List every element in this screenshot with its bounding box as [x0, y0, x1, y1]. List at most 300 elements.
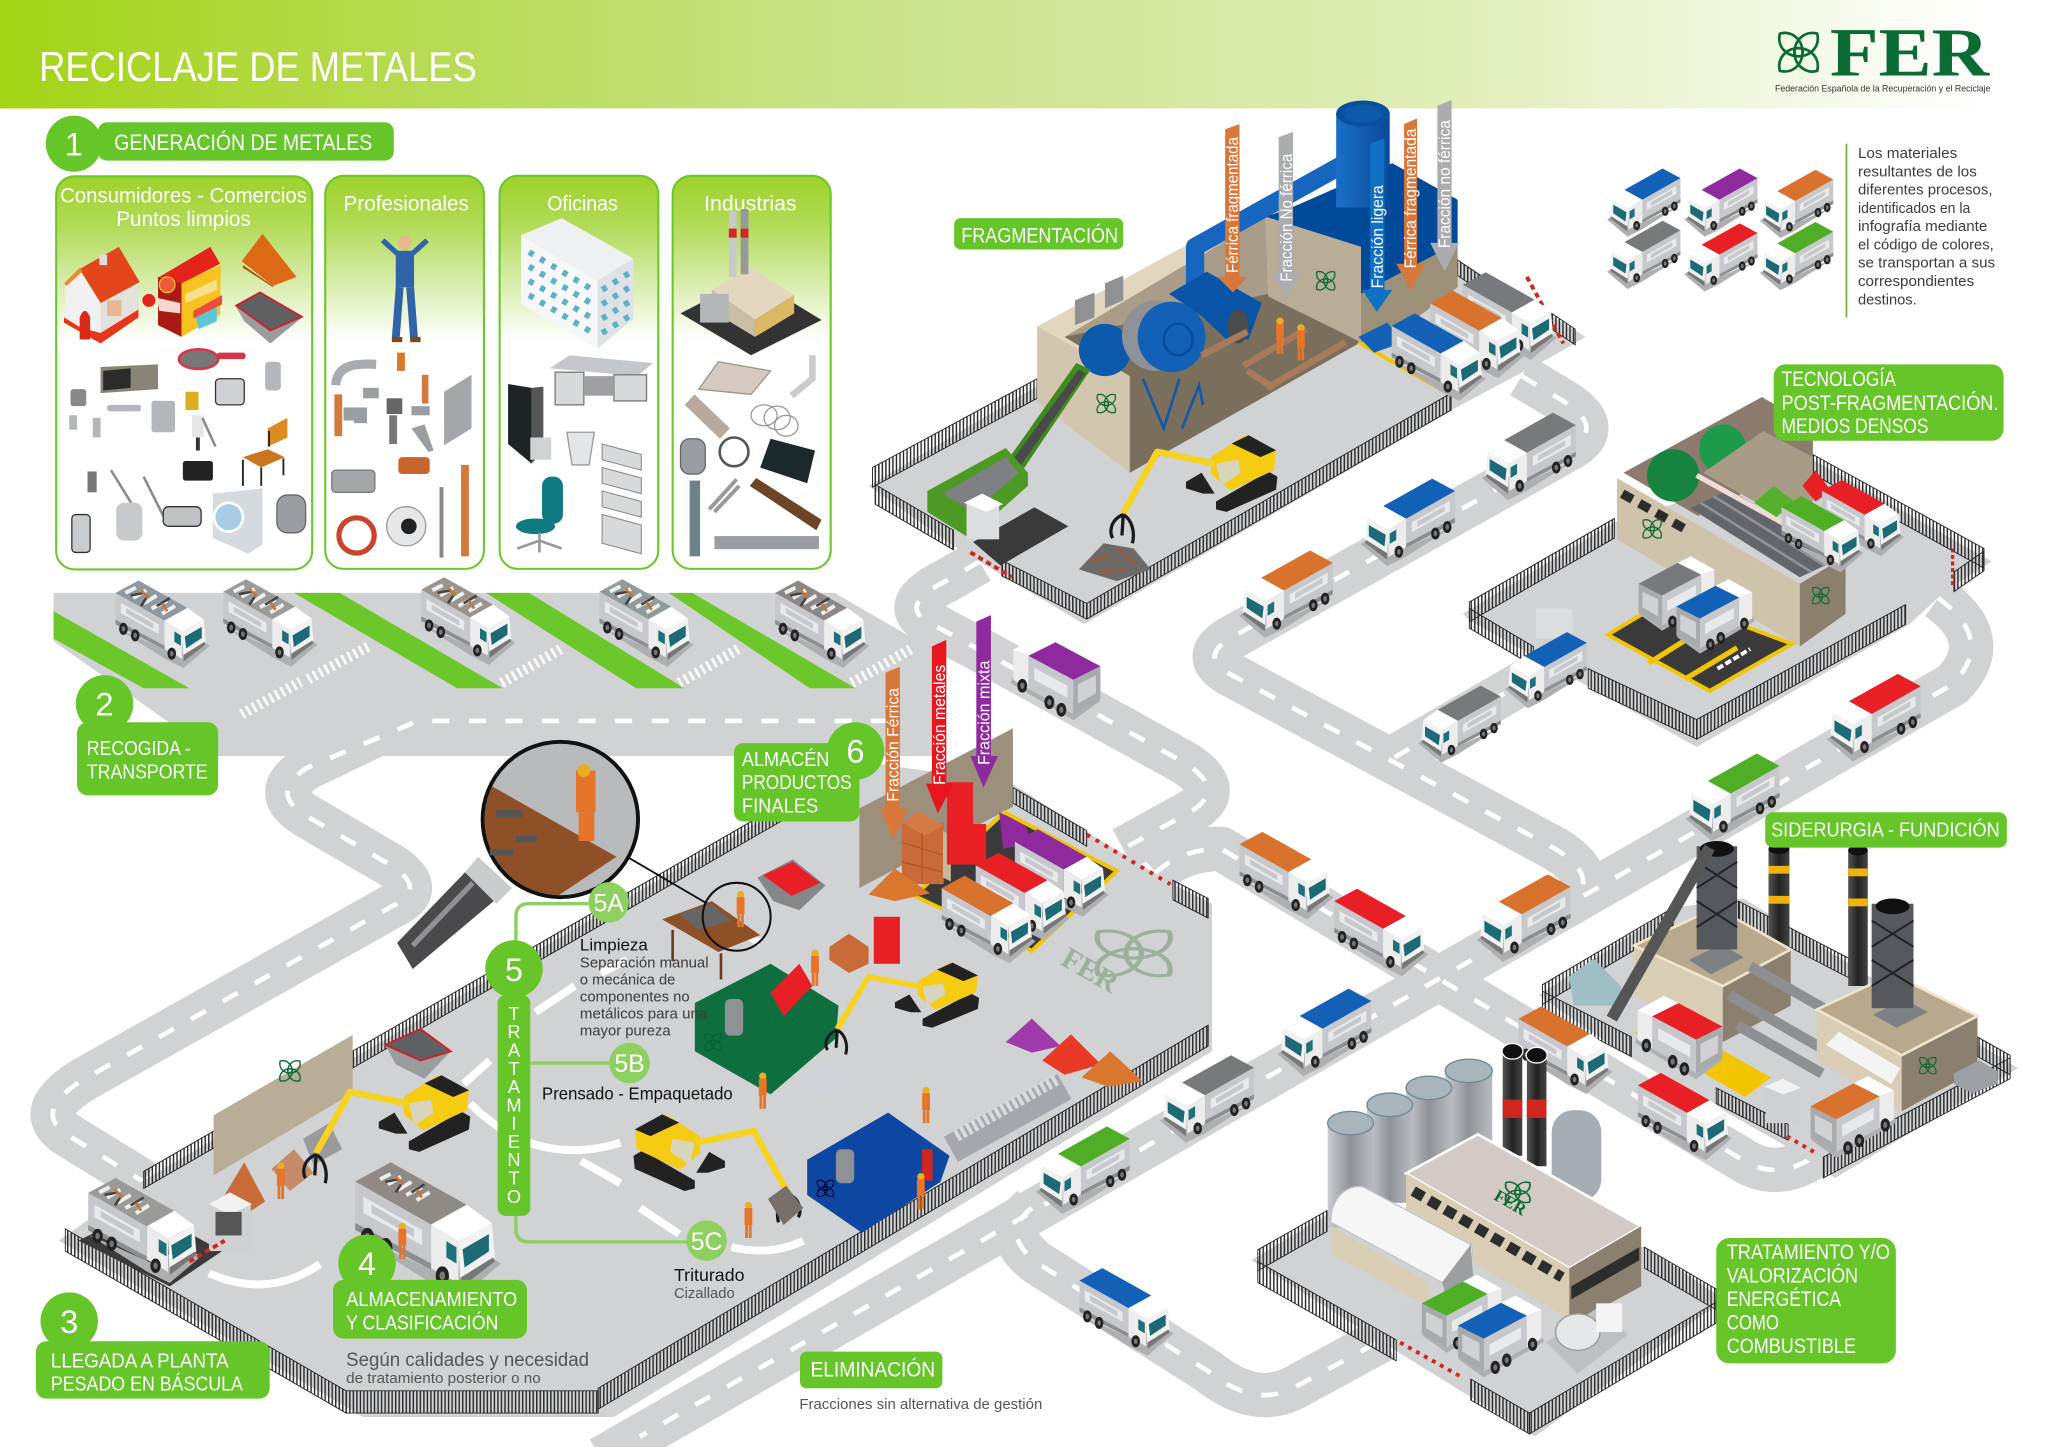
icon: gasket — [690, 400, 725, 434]
truck gray — [1482, 413, 1576, 500]
step 4: almacenamiento y clasificación: ALMACENAMIENTO — [346, 1289, 517, 1311]
text: triturado: Triturado — [674, 1265, 745, 1285]
icon: wire coil — [720, 437, 748, 466]
truck blue — [1361, 479, 1455, 566]
step 4: almacenamiento y clasificación: Y CLASIFICACIÓN — [346, 1311, 498, 1334]
arrow: fracción mixta — [970, 615, 998, 787]
collection trucks — [116, 577, 869, 668]
booth — [1765, 1079, 1801, 1123]
entrance truck — [88, 1178, 201, 1283]
worker — [759, 1072, 767, 1109]
icon: brake disc — [387, 507, 426, 546]
red arrow pile — [1802, 470, 1831, 501]
truck red — [1638, 1073, 1732, 1160]
ac unit — [1954, 1060, 1997, 1093]
purple bay — [999, 812, 1032, 849]
truck gray — [1160, 1055, 1254, 1143]
post-fragmentation plant — [1505, 397, 1953, 708]
truck green — [1782, 496, 1863, 572]
panel: consumidores: Puntos limpios — [116, 207, 251, 231]
hopper scrap — [943, 457, 1019, 512]
press logo — [705, 1034, 721, 1050]
text: limpieza: Limpieza — [580, 937, 649, 955]
arrow: fracción no férrica 1: Fracción No férrica — [1277, 153, 1296, 282]
arrow: fracción no férrica 1 — [1272, 132, 1301, 298]
icon: waste basket — [567, 432, 594, 465]
booth — [1536, 609, 1573, 639]
chimney pair — [1502, 1043, 1547, 1166]
truck red — [1635, 996, 1722, 1079]
green feed conveyor — [1000, 363, 1091, 470]
icon: pan — [179, 349, 246, 369]
excavator shredder — [633, 1114, 800, 1222]
label: tratamiento y/o valorización: ENERGÉTICA — [1727, 1288, 1841, 1311]
label: tratamiento y/o valorización: COMO — [1727, 1311, 1779, 1334]
panel: profesionales: Profesionales — [344, 191, 469, 215]
barrier — [970, 552, 1012, 577]
step 2: recogida - transporte: TRANSPORTE — [87, 761, 208, 783]
label: siderurgia - fundición — [1765, 812, 2007, 848]
worker — [811, 950, 819, 986]
step 5: tratamiento: A — [508, 1076, 521, 1097]
icon: house — [64, 247, 140, 343]
wall logo — [280, 1061, 300, 1081]
parking bays — [914, 812, 1117, 951]
badge 5B — [609, 1043, 650, 1083]
legend text: correspondientes — [1858, 273, 1974, 290]
pile purple — [1006, 1019, 1061, 1053]
panel: oficinas — [500, 176, 658, 569]
worker — [398, 1223, 406, 1259]
label: fragmentación — [954, 218, 1123, 249]
label: fragmentación: FRAGMENTACIÓN — [961, 224, 1118, 247]
label: tecnología post-fragmentación: POST-FRAGMENTACIÓN. — [1782, 392, 1998, 415]
text: limpieza: Separación manual — [580, 955, 709, 972]
badge 5C — [686, 1220, 727, 1261]
step 6: almacén productos finales: PRODUCTOS — [742, 772, 852, 794]
treatment plant — [1328, 1043, 1641, 1378]
arrow: fracción ligera — [1362, 138, 1392, 312]
icon: steel tube — [714, 536, 819, 549]
lattice tower 1 — [1697, 841, 1737, 949]
logo: FER: FER — [1830, 14, 1990, 91]
badge 5A: 5A — [593, 891, 624, 918]
arrow: fracción no férrica 2 — [1430, 100, 1459, 272]
arrow: fracción metales: Fracción metales — [930, 665, 949, 785]
pile red — [1042, 1034, 1101, 1075]
scale pad — [78, 1208, 222, 1286]
step 6: almacén productos finales: FINALES — [742, 795, 818, 817]
corrugated roof — [1690, 490, 1844, 577]
icon: washing machine — [213, 488, 263, 554]
sorted scrap — [225, 1123, 342, 1217]
text: según calidades — [346, 1350, 589, 1387]
truck orange back — [1811, 1076, 1897, 1158]
icon: office chair — [516, 477, 563, 552]
step 6: almacén productos finales — [734, 722, 884, 821]
step 5: tratamiento: N — [507, 1149, 521, 1170]
siderurgia plant — [1518, 841, 1997, 1160]
parking lines — [1648, 632, 1737, 679]
roof vents — [1075, 276, 1123, 325]
silo 4 — [1445, 1059, 1492, 1162]
orange cubes — [829, 934, 869, 973]
chimney 2 — [1848, 845, 1868, 986]
shredder scrap — [768, 1186, 803, 1225]
inner room — [1703, 431, 1813, 503]
label: eliminación — [800, 1352, 942, 1388]
floor logo: FER — [1056, 941, 1125, 1000]
truck 5 — [775, 580, 869, 668]
step 2: recogida - transporte — [76, 675, 218, 795]
truck gray back — [1639, 556, 1717, 631]
icon: desk — [550, 355, 653, 405]
label: eliminación: ELIMINACIÓN — [810, 1358, 935, 1381]
truck red — [1827, 674, 1921, 761]
badge 5B: 5B — [614, 1051, 645, 1078]
badge 5A — [588, 882, 629, 923]
right window — [1571, 1247, 1639, 1299]
header band — [0, 0, 2048, 108]
legend text: diferentes procesos, — [1858, 182, 1992, 199]
collection road band — [54, 593, 934, 756]
green verges — [54, 593, 856, 688]
excavator storage — [304, 1075, 470, 1183]
yellow bay — [1633, 1032, 1771, 1097]
icon: recycling container — [242, 234, 296, 287]
step 5: tratamiento: E — [508, 1131, 520, 1152]
icon: factory — [680, 209, 822, 355]
green hopper — [927, 448, 1028, 538]
gate barrier — [1400, 1343, 1463, 1378]
step 5: tratamiento: M — [506, 1094, 522, 1115]
floor arrow — [1718, 649, 1750, 669]
panel: industrias — [673, 176, 831, 569]
legend: colour coded trucks — [1607, 168, 1833, 292]
panel: oficinas: Oficinas — [547, 191, 618, 215]
roof — [1406, 1134, 1641, 1268]
blue shredder — [807, 1113, 950, 1233]
text: limpieza: mayor pureza — [580, 1023, 671, 1040]
truck purple — [1015, 829, 1109, 917]
roof stripes — [1701, 496, 1825, 572]
step 5: tratamiento: 5 — [505, 951, 523, 988]
logo on wall — [1643, 520, 1661, 538]
icon: microwave — [101, 364, 158, 393]
truck green — [1036, 1126, 1130, 1214]
step 2: recogida - transporte: RECOGIDA - — [87, 738, 191, 760]
icon: office block — [521, 218, 633, 349]
step 3: llegada a planta: LLEGADA A PLANTA — [51, 1350, 229, 1372]
truck red — [976, 853, 1070, 940]
pile orange — [1081, 1051, 1143, 1087]
shredder logo — [817, 1180, 834, 1197]
drum 1 — [1122, 300, 1206, 372]
icon: filing cabinet — [508, 384, 551, 464]
sorting wall — [214, 1035, 353, 1175]
worker — [277, 1163, 285, 1199]
logo on wall — [1317, 272, 1335, 290]
legend truck green — [1760, 222, 1833, 290]
legend text: se transportan a sus — [1858, 255, 1995, 272]
icon: copper pipe — [461, 465, 469, 556]
pointer line — [627, 857, 712, 906]
fences — [65, 260, 2010, 1434]
parking — [1608, 598, 1792, 691]
truck red — [1822, 480, 1904, 556]
red cubes — [874, 917, 900, 964]
arrow: férrica fragmentada 1: Férrica fragmentada — [1223, 137, 1242, 273]
legend text: el código de colores, — [1858, 236, 1994, 253]
step 2: recogida - transporte: 2 — [95, 686, 114, 723]
left face — [1617, 478, 1800, 646]
internal conveyors — [1202, 329, 1345, 388]
icon: column — [690, 481, 700, 556]
truck orange — [1239, 550, 1333, 638]
rear tank — [1552, 1110, 1601, 1201]
building left face — [1037, 326, 1130, 473]
title: RECICLAJE DE METALES — [39, 43, 477, 90]
icon: metal rings — [751, 405, 798, 436]
icon: worker — [383, 236, 427, 342]
barrier — [189, 1241, 225, 1262]
label: tecnología post-fragmentación: MEDIOS DENSOS — [1782, 415, 1928, 438]
tipper truck — [355, 1162, 501, 1298]
truck blue — [1277, 989, 1371, 1076]
icon: window frame — [792, 355, 812, 396]
duct — [1195, 158, 1354, 313]
building 1 — [1634, 908, 1791, 1042]
step 3: llegada a planta: PESADO EN BÁSCULA — [51, 1372, 243, 1395]
label: siderurgia - fundición: SIDERURGIA - FUNDICIÓN — [1771, 819, 2000, 842]
magnifier — [470, 742, 638, 901]
silo 3 — [1406, 1076, 1452, 1185]
green press — [695, 964, 839, 1094]
worker — [737, 891, 744, 927]
truck green back — [1422, 1275, 1504, 1353]
icon: steel beam — [750, 478, 822, 530]
chimney — [1336, 101, 1390, 208]
worker — [744, 1202, 752, 1238]
icon: pot — [216, 379, 244, 405]
arrow: fracción férrica: Fracción Férrica — [884, 687, 903, 802]
pipes — [1729, 966, 1842, 1073]
icon: perforated sheet — [699, 362, 771, 394]
excavator press — [826, 963, 979, 1054]
green drum 1 — [1647, 449, 1699, 501]
truck blue — [1392, 313, 1486, 401]
road trucks upper — [1010, 413, 1921, 841]
text: limpieza: componentes no — [580, 989, 690, 1006]
logo side — [1813, 587, 1829, 604]
icon: valve wheel — [339, 518, 374, 553]
step 3: llegada a planta: 3 — [60, 1303, 78, 1340]
truck orange — [1240, 832, 1334, 919]
worker — [917, 1173, 925, 1209]
step 6: almacén productos finales: ALMACÉN — [742, 748, 829, 771]
weighbridge — [973, 507, 1068, 565]
blue pile — [1358, 323, 1404, 353]
gate booth — [964, 494, 1003, 539]
icon: copper fitting — [398, 457, 430, 474]
text: según calidades: de tratamiento posterior o no — [346, 1371, 541, 1387]
bays — [1361, 243, 1458, 342]
label: tecnología post-fragmentación: TECNOLOGÍA — [1782, 368, 1896, 391]
connector lines for step 5 — [516, 904, 687, 1242]
step 5: tratamiento: I — [511, 1113, 516, 1134]
building 2 — [1817, 974, 1977, 1111]
icon: skip — [235, 292, 303, 343]
text: fracciones sin alternativa: Fracciones sin alternativa de gestión — [799, 1396, 1042, 1413]
truck 3 — [421, 577, 515, 665]
window band — [1622, 494, 1685, 529]
text: triturado — [674, 1265, 745, 1302]
logo on side wall — [1097, 394, 1115, 413]
label: tratamiento y/o valorización: TRATAMIENTO Y/O — [1727, 1241, 1890, 1264]
truck purple — [1010, 635, 1100, 720]
logo: FER: Federación Española de la Recuperación y el Reciclaje — [1775, 83, 1991, 93]
chimney 1 — [1768, 844, 1789, 948]
legend text: infografía mediante — [1858, 218, 1987, 235]
label: tratamiento y/o valorización — [1716, 1238, 1896, 1363]
icon: steel rod — [440, 487, 443, 558]
text: triturado: Cizallado — [674, 1285, 735, 1302]
gate barrier — [1787, 1136, 1818, 1154]
icon: cylinder — [680, 439, 705, 474]
scrap pile — [1079, 543, 1151, 581]
floor logo — [1056, 931, 1170, 1000]
text: prensado: Prensado - Empaquetado — [542, 1084, 733, 1104]
truck 4 — [600, 579, 694, 667]
arrow: fracción mixta: Fracción mixta — [974, 660, 993, 765]
step 6: almacén productos finales: 6 — [846, 733, 865, 770]
windows band — [1413, 1191, 1562, 1277]
icon: metal cylinder — [277, 495, 306, 533]
step 5: tratamiento: A — [508, 1040, 521, 1061]
icon: camera — [183, 461, 213, 481]
excavator — [1111, 435, 1277, 543]
right face — [1800, 556, 1846, 646]
skip — [385, 1028, 451, 1079]
orange pile — [869, 868, 930, 901]
text: limpieza: o mecánica de — [580, 972, 675, 989]
inclined conveyor — [1612, 848, 1710, 1019]
step 4: almacenamiento y clasificación — [333, 1235, 527, 1339]
panel: industrias: Industrias — [704, 191, 797, 215]
text: limpieza: metálicos para una — [580, 1006, 708, 1023]
gate barrier — [1527, 277, 1563, 343]
legend text: Los materiales — [1858, 145, 1957, 162]
roof logo: FER — [1491, 1186, 1530, 1220]
step 5: tratamiento: T — [508, 1058, 520, 1079]
rear wall — [1266, 217, 1361, 342]
road trucks lower — [1036, 832, 1571, 1356]
truck gray — [1463, 272, 1557, 360]
green pile — [1754, 486, 1795, 517]
panel: profesionales — [325, 176, 484, 569]
text: según calidades: Según calidades y necesidad — [346, 1350, 589, 1371]
workers — [1276, 318, 1284, 354]
step 1: generación de metales: GENERACIÓN DE METALES — [114, 130, 372, 155]
icon: shop — [142, 247, 222, 337]
left wall — [1406, 1173, 1569, 1319]
icon: chair — [243, 418, 287, 486]
red cubes — [947, 782, 986, 865]
white tank — [1331, 1187, 1473, 1306]
icon: drum — [116, 503, 142, 541]
detail circle — [703, 883, 771, 951]
step 5: tratamiento: O — [507, 1186, 521, 1207]
legend truck orange — [1760, 170, 1833, 238]
gate barrier — [1087, 835, 1170, 884]
arrow: fracción no férrica 2: Fracción no férrica — [1435, 120, 1454, 248]
road network — [53, 376, 1971, 1447]
icon: blender — [72, 515, 90, 552]
step 3: llegada a planta — [36, 1292, 270, 1399]
interior wall — [1064, 217, 1268, 353]
floor — [1064, 294, 1361, 473]
step 5: tratamiento: T — [508, 1168, 520, 1189]
zebra crossings — [242, 646, 1147, 888]
bale pile — [794, 1060, 846, 1100]
icon: valve — [332, 470, 375, 492]
truck gray — [1418, 686, 1501, 763]
logo: FER — [1775, 14, 1991, 93]
icon: household metal items — [69, 362, 281, 518]
legend text — [1846, 144, 1995, 317]
icon: shelving — [602, 444, 641, 554]
lattice tower 2 — [1872, 898, 1913, 1008]
arrow: férrica fragmentada 2 — [1396, 118, 1425, 290]
arrow: férrica fragmentada 2: Férrica fragmentada — [1401, 128, 1420, 268]
worker — [922, 1087, 930, 1123]
step 5: tratamiento — [485, 940, 543, 1216]
icon: faucet — [336, 364, 376, 385]
booth — [1401, 1303, 1428, 1343]
arrow: fracción ligera: Fracción ligera — [1368, 185, 1387, 288]
label: tratamiento y/o valorización: COMBUSTIBLE — [1727, 1335, 1856, 1358]
icon: screws and parts — [334, 353, 434, 452]
hood — [1169, 272, 1262, 340]
truck orange — [1518, 1006, 1612, 1094]
truck 2 — [223, 579, 317, 667]
legend truck red — [1684, 223, 1758, 292]
fragmentation plant — [927, 101, 1563, 581]
badge 5C: 5C — [691, 1229, 722, 1256]
warehouse wall — [859, 728, 1013, 888]
main recycling plant details — [78, 728, 1170, 1298]
worker — [1297, 324, 1305, 360]
yellow loading line — [1358, 342, 1447, 393]
label: tecnología post-fragmentación — [1774, 364, 2004, 441]
output conveyor — [951, 1079, 1064, 1149]
legend truck purple — [1684, 168, 1758, 237]
truck red — [1334, 889, 1428, 976]
platforms — [59, 261, 2018, 1437]
truck orange — [1477, 874, 1571, 962]
truck 1 — [116, 580, 210, 668]
green drum 2 — [1699, 424, 1746, 474]
legend text: identificados en la — [1858, 200, 1971, 217]
truck orange — [1430, 291, 1524, 378]
icon: black sheet — [760, 439, 815, 483]
step 4: almacenamiento y clasificación: 4 — [358, 1245, 376, 1282]
orange cubes — [902, 812, 944, 884]
arrow: fracción metales — [926, 640, 953, 813]
arrow: fracción férrica — [880, 667, 908, 839]
concrete mixer — [1546, 1303, 1627, 1374]
support legs — [1143, 379, 1203, 428]
